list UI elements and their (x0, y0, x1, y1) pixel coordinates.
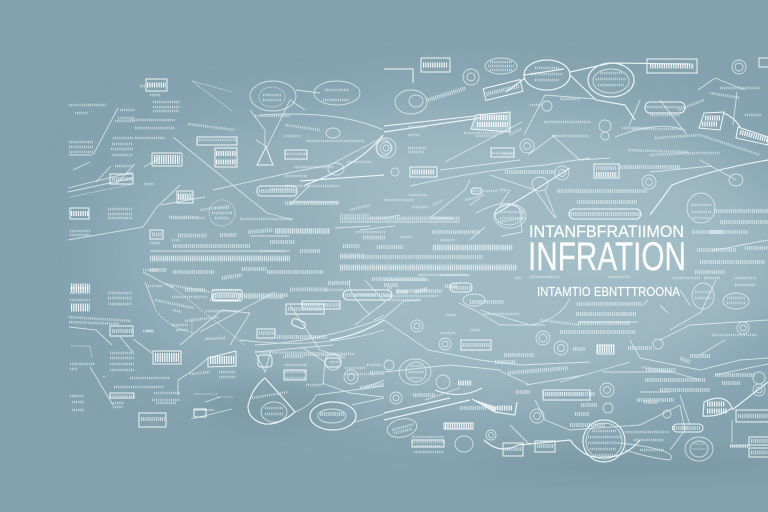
lens: lower left oval (248, 378, 295, 424)
box: bottom right tags (730, 437, 768, 457)
box: bright tag right (699, 112, 724, 130)
title: upper line: INTANFBFRATIIMON (529, 222, 684, 241)
box: bright middle tag A (410, 167, 437, 177)
box: bottom tags (503, 441, 555, 456)
title: sub line: INTAMTIO EBNTTTROONA (537, 284, 680, 299)
oval: top centre left (524, 60, 570, 90)
labelled box: upper left (140, 79, 167, 95)
labelled box: lower left (110, 174, 133, 184)
diagram cluster: upper right network (376, 58, 768, 162)
dome: lower centre (583, 420, 625, 462)
box: bright tag far right (736, 127, 768, 145)
diagram cluster: middle band rows (384, 158, 768, 300)
box: bright centre tag (597, 345, 614, 354)
oval: middle lens (494, 204, 526, 228)
diagram cluster: central text rows (148, 218, 517, 325)
diagram cluster: lower right network (384, 277, 768, 462)
lens: lower right oval (310, 402, 356, 430)
oval: top centre right (588, 63, 634, 97)
box: bright middle tag B (594, 164, 619, 178)
arrow tag: lower centre (472, 399, 517, 415)
box: lower left tag (110, 326, 133, 336)
box: upper label (421, 58, 450, 72)
box: top right label (647, 59, 697, 73)
diagram cluster: left centre ovals (250, 81, 391, 236)
labelled box: bright right (215, 148, 237, 167)
diagram cluster: left column (68, 79, 383, 240)
box: bright tag left (471, 112, 510, 132)
diagram cluster: lower left (69, 270, 384, 430)
box: bright tag right of centre (208, 351, 236, 367)
box: outlined tag centre (153, 351, 181, 364)
labelled box: bright centre left (152, 153, 182, 166)
title group (528, 222, 686, 299)
tag: right arc (703, 398, 732, 416)
box: dark lower label (444, 423, 473, 429)
title: main word: INFRATION (528, 235, 686, 279)
